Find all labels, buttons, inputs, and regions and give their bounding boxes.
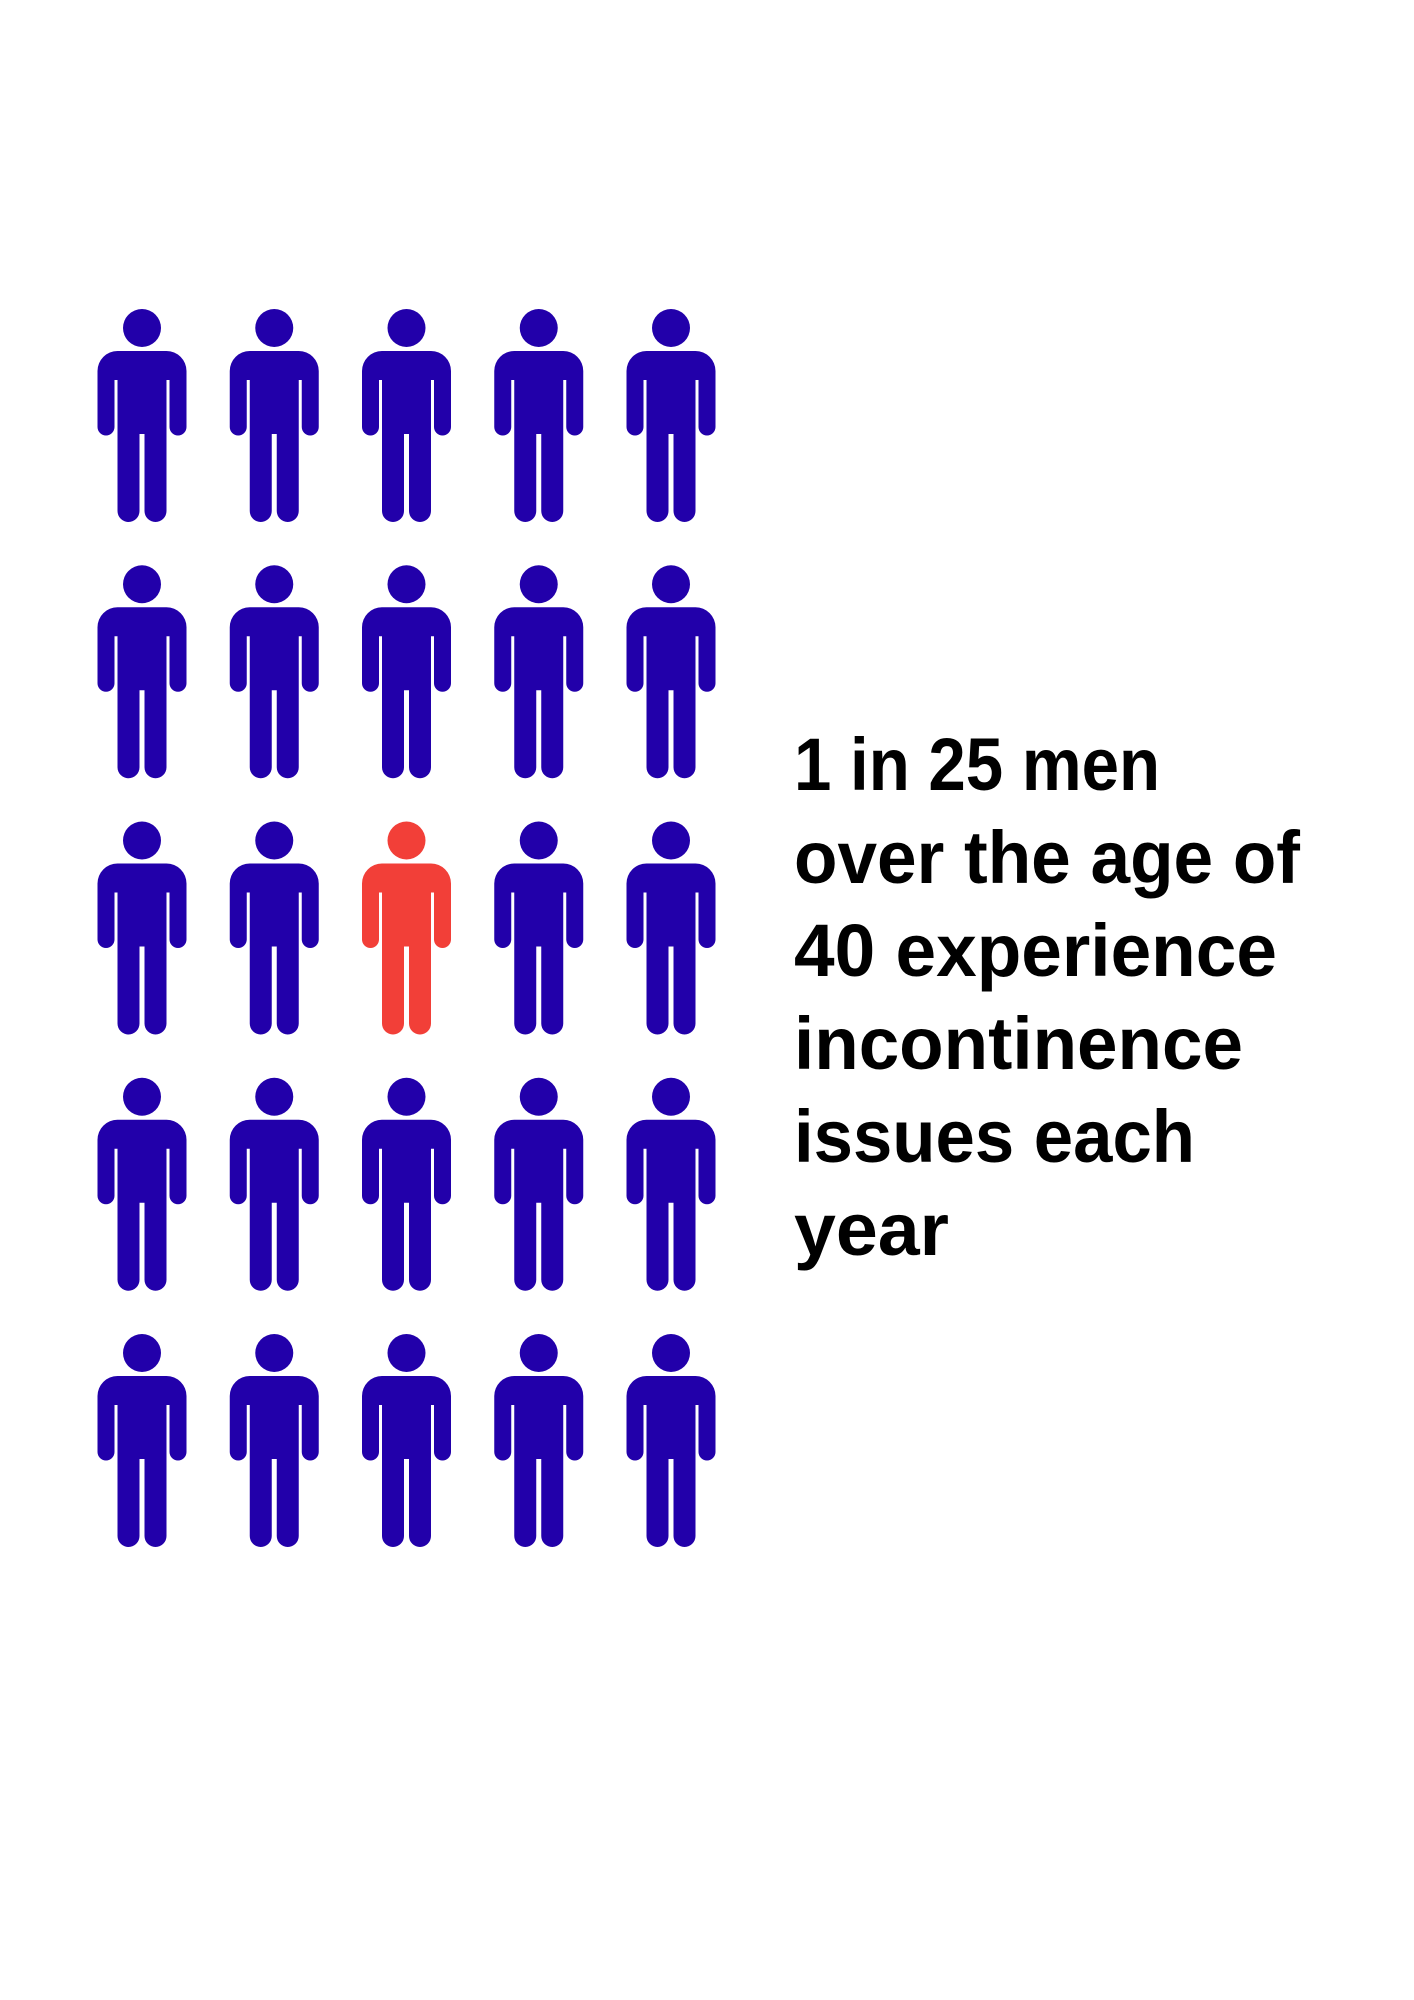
statistic text: issues each [794,1095,1195,1178]
statistic text: 1 in 25 men [794,723,1160,806]
statistic text: over the age of [794,816,1300,899]
row 1 [98,309,716,522]
row 4 [98,1078,716,1291]
row 5 [98,1334,716,1547]
statistic text: 40 experience [794,909,1277,992]
row 2 [98,565,716,778]
statistic text: incontinence [794,1002,1243,1085]
statistic text: year [794,1188,949,1271]
pictogram grid: 25 men, 1 highlighted [98,309,716,1547]
statistic text [794,723,1300,1271]
row 3 with highlighted man [98,822,716,1034]
